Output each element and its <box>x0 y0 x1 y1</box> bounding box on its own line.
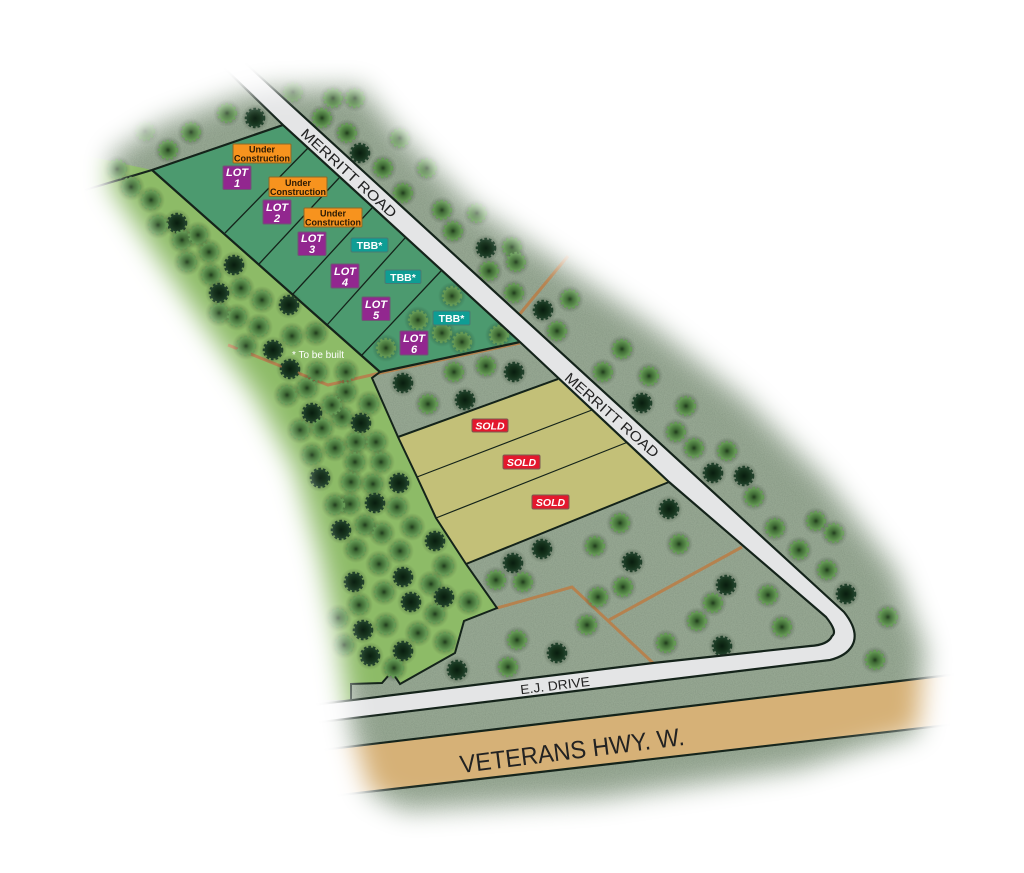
west green area <box>101 160 496 700</box>
panel: lots 1 to 6 <box>152 125 520 372</box>
badges: lot numbers: LOT <box>226 167 249 179</box>
trees <box>103 78 902 684</box>
badges: lot numbers: LOT <box>334 266 357 278</box>
badges: lot numbers: 2 <box>273 213 280 225</box>
badges: lot numbers: LOT <box>365 299 388 311</box>
label: E.J. Drive: E.J. DRIVE <box>519 674 591 697</box>
badges: lot numbers: LOT <box>266 202 289 214</box>
badges: lot numbers: LOT <box>403 333 426 345</box>
badges: lot numbers: 1 <box>234 178 240 190</box>
road: Veterans Hwy W. <box>338 675 942 794</box>
road: Merritt Road and E.J. Drive <box>215 45 855 727</box>
badges: lot numbers: 4 <box>341 277 348 289</box>
badges: TBB: TBB* <box>390 272 417 284</box>
site map <box>91 70 945 827</box>
badges: under construction: Under <box>285 178 311 188</box>
dirt paths <box>228 256 742 663</box>
badges: sold: SOLD <box>475 420 505 432</box>
badges: under construction: Under <box>249 144 275 154</box>
note: to be built: * To be built <box>292 350 344 361</box>
badges: under construction: Under <box>320 208 346 218</box>
badges: under construction <box>233 144 362 228</box>
label: Merritt Road upper: MERRITT ROAD <box>298 125 400 221</box>
badges: TBB: TBB* <box>357 240 383 252</box>
label: Merritt Road lower: MERRITT ROAD <box>562 369 662 461</box>
badges: TBB: TBB* <box>439 313 465 325</box>
badges: sold: SOLD <box>507 457 536 469</box>
badges: sold <box>472 419 569 509</box>
badges: lot numbers: 5 <box>373 310 380 322</box>
badges: under construction: Construction <box>305 218 361 228</box>
badges: under construction: Construction <box>270 187 326 197</box>
panel: sold lots <box>398 379 669 564</box>
badges: lot numbers: 3 <box>309 244 315 256</box>
badges: TBB <box>351 238 470 325</box>
badges: under construction: Construction <box>234 154 290 164</box>
badges: sold: SOLD <box>536 497 565 509</box>
badges: lot numbers: 6 <box>411 344 418 356</box>
badges: lot numbers: LOT <box>301 233 324 245</box>
label: Veterans Hwy W.: VETERANS HWY. W. <box>458 723 686 779</box>
ground <box>96 70 942 826</box>
lot boundary lines <box>85 125 669 702</box>
badges: lot numbers <box>223 166 428 356</box>
map artwork with soft edge <box>91 70 945 827</box>
